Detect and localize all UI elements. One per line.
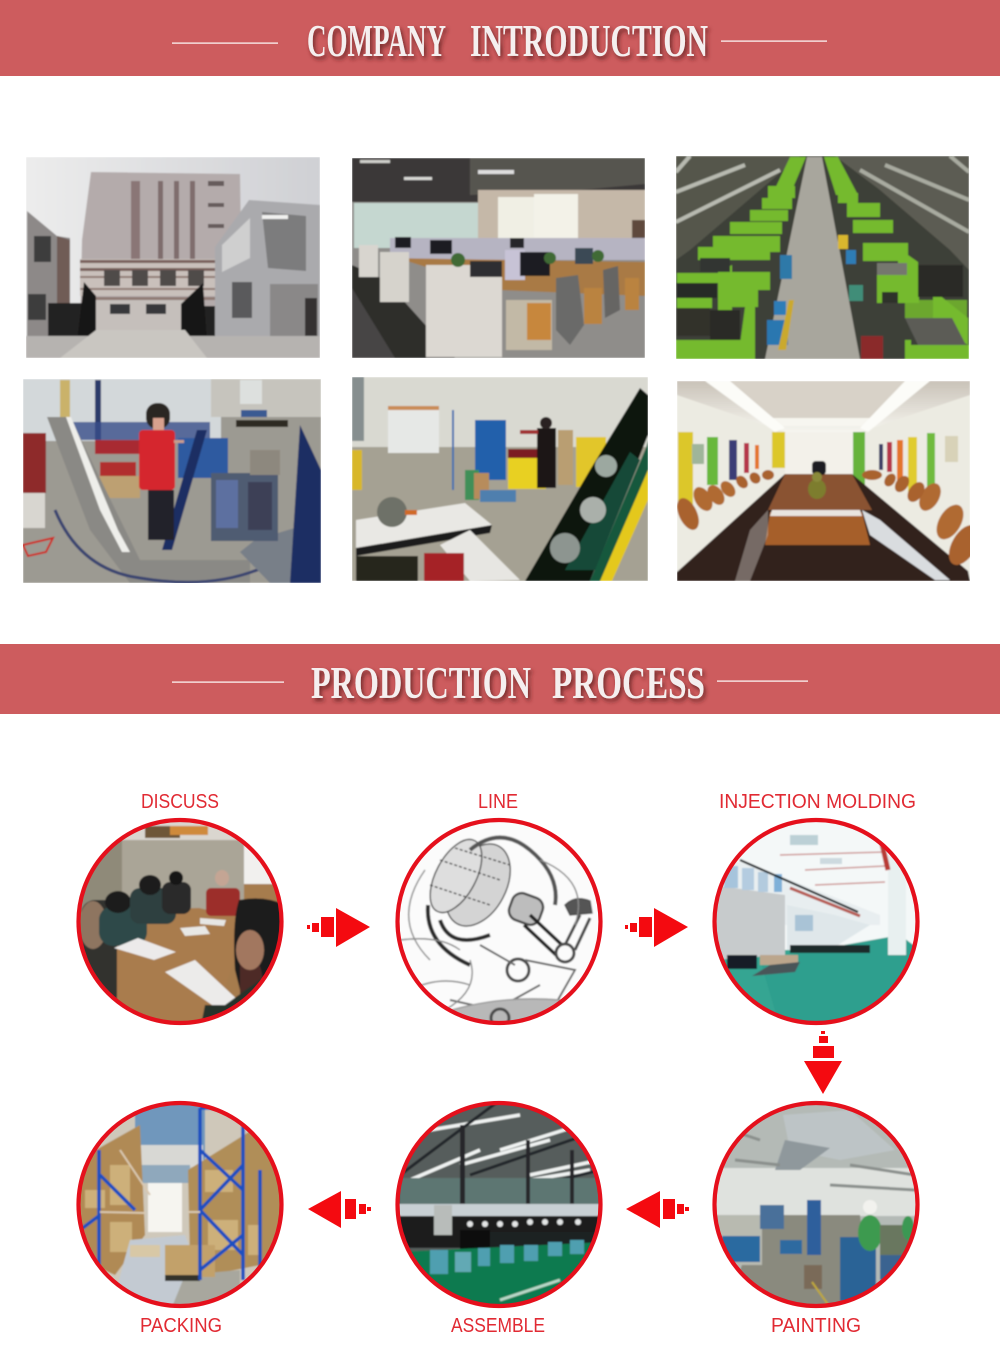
step: packing: PACKING [140,1315,222,1337]
step: line: LINE [478,791,518,813]
photo: factory building exterior [26,157,320,358]
arrow: assemble to packing [308,1191,371,1228]
step: painting [712,1100,922,1337]
header banner: company introduction: INTRODUCTION [470,15,708,66]
step: injection molding [712,791,922,1028]
header banner: company introduction [0,0,1000,76]
step: discuss [76,791,286,1030]
header banner: company introduction: COMPANY [307,15,446,66]
photo: worker beside packaging conveyor [23,379,321,583]
photo: injection moulding hall with green machines [676,156,969,359]
arrow: painting to assemble [626,1191,689,1228]
arrow: injection molding to painting [804,1031,842,1094]
arrow: discuss to line [307,908,370,947]
header banner: production process: PROCESS [552,657,705,708]
photo: long conference room [673,381,985,581]
step: injection molding: INJECTION MOLDING [719,791,916,813]
step: assemble [395,1100,605,1337]
header banner: production process: PRODUCTION [311,657,531,708]
photo: open-plan office [352,158,645,358]
step: packing [76,1100,286,1337]
step: assemble: ASSEMBLE [451,1315,545,1337]
step: painting: PAINTING [771,1315,861,1337]
photo: assembly floor with green conveyor [352,377,648,581]
header banner: production process [0,644,1000,714]
step: discuss: DISCUSS [141,791,219,813]
arrow: line to injection molding [625,908,688,947]
step: line [395,791,605,1027]
